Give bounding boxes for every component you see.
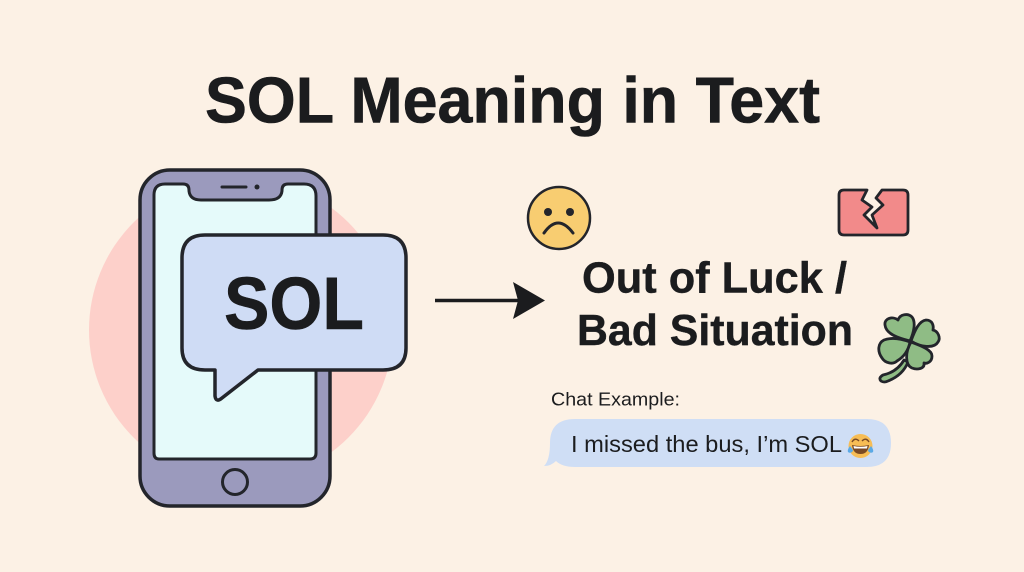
definition text: Out of Luck / <box>582 254 847 302</box>
definition text: Bad Situation <box>577 306 853 355</box>
definition text <box>577 254 853 355</box>
phone screen <box>154 184 316 459</box>
title: SOL Meaning in Text <box>205 64 820 136</box>
speech bubble: SOL <box>182 235 406 400</box>
phone home button <box>222 470 248 494</box>
speech bubble: SOL: SOL <box>224 262 364 345</box>
background circle <box>89 178 393 482</box>
arrow <box>435 282 545 319</box>
icon: laughing emoji <box>848 434 873 458</box>
icon: broken card <box>839 190 908 235</box>
icon: sad face <box>528 187 590 249</box>
icon: smartphone <box>140 170 330 506</box>
icon: four-leaf clover <box>879 315 939 382</box>
chat bubble <box>544 419 891 467</box>
chat bubble: I missed the bus, I’m SOL <box>571 431 842 457</box>
chat example label: Chat Example: <box>551 388 680 410</box>
phone camera <box>254 184 260 190</box>
phone speaker <box>222 186 246 188</box>
